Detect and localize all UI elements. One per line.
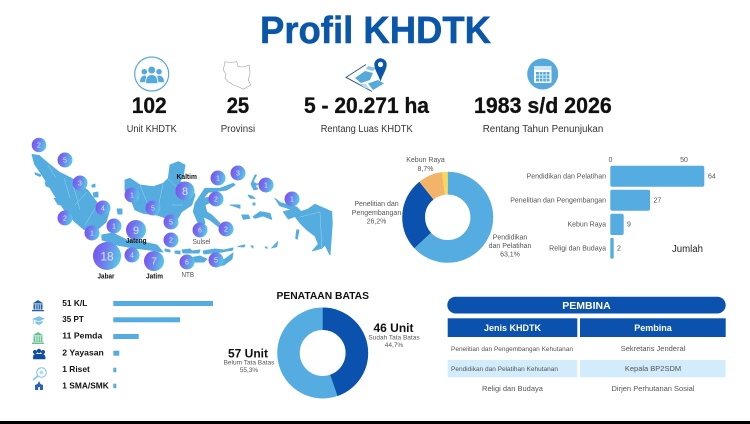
category labels: Penelitian dan Pengembangan [510,198,606,204]
donut labels: Pendidikan [493,234,527,242]
bubble group: 1 [290,196,294,204]
row: Yayasan: 2 Yayasan [62,347,104,357]
donut labels: Penelitian dan [354,201,399,208]
map labels: NTB [182,272,194,279]
axis labels [609,157,688,164]
stat: unit KHDTK: Unit KHDTK [127,124,177,135]
bubble group: 9 [133,225,139,237]
icon: calendar [527,58,558,90]
donut labels: Kebun Raya [406,157,445,164]
row: K/L [32,298,213,311]
map labels: Jatim [146,274,163,280]
label: sudah tata batas: 46 Unit [373,321,414,335]
list: pengelola [32,298,213,391]
bubble group: 2 [224,226,228,234]
bubble group: 6 [185,260,189,266]
label: belum tata batas [224,346,275,374]
stat: rentang tahun: Rentang Tahun Penunjukan [483,124,603,135]
section: penataan batas [224,290,420,387]
map labels: Kaltim [176,174,197,181]
category labels: Pendidikan dan Pelatihan [527,174,606,180]
value labels [617,174,716,252]
value labels: 64 [708,174,716,180]
stat: provinsi: Provinsi [221,124,255,135]
stat: unit KHDTK [127,57,177,135]
row: religi: Religi dan Budaya [482,384,544,393]
bubble group: 1 [264,182,268,190]
value labels: 2 [617,246,621,252]
bubble group: 3 [236,170,240,178]
label: sudah tata batas [368,321,420,349]
bubble group: 6 [198,228,202,234]
row: Riset: 1 Riset [62,364,90,374]
bubble group: 2 [63,216,67,222]
axis labels: 50 [680,157,688,164]
category labels [510,174,606,252]
bubble group: 8 [182,186,188,198]
stat: unit KHDTK: 102 [132,93,167,118]
bubble group: 2 [169,238,173,244]
bubble group: 2 [37,142,41,150]
row: penelitian: Penelitian dan Pengembangan Kehutanan [451,347,573,353]
icon: province outline [223,62,251,89]
row: PT [32,314,180,325]
map labels: Jabar [98,274,115,280]
value labels: 27 [654,198,661,204]
donut labels [352,157,532,258]
bubble group: 7 [151,256,157,268]
axis title: Jumlah [672,244,703,255]
header row: Pembina [634,323,673,333]
row: pendidikan: Pendidikan dan Pelatihan Kehutanan [451,367,558,373]
donut chart: jenis KHDTK [352,157,532,258]
donut labels: 26,2% [367,218,386,226]
row: pendidikan: Kepala BP2SDM [625,364,681,373]
donut labels: dan Pelatihan [489,243,532,250]
bubble group: 4 [101,206,105,212]
table title pill: PEMBINA [562,300,611,312]
donut segments [414,183,482,251]
bubble group: 5 [63,158,67,164]
stat: rentang tahun: 1983 s/d 2026 [474,93,612,118]
table title pill [447,297,726,314]
row: SMA/SMK: 1 SMA/SMK [62,381,110,391]
donut labels: 63,1% [500,252,520,258]
row: SMA/SMK [35,381,116,391]
bubble group: 1 [90,230,94,238]
map: islands [32,154,332,266]
bubble group [32,138,299,271]
header row [448,318,726,337]
donut labels: 8,7% [418,166,433,173]
stat: rentang tahun [474,58,612,135]
map of Indonesia with bubbles [32,138,332,280]
stat: rentang luas [304,58,430,135]
bubble group: 1 [130,192,134,200]
row: religi: Dirjen Perhutanan Sosial [612,384,695,393]
map labels: Jateng [126,238,146,245]
bubble group: 4 [130,252,134,260]
row: Pemda [32,331,139,344]
row: Riset [33,364,116,380]
bubble group: 18 [100,250,114,264]
category labels: Religi dan Budaya [549,246,606,252]
bubble group: 1 [112,224,116,230]
map labels [98,174,211,280]
stat: rentang luas: 5 - 20.271 ha [304,93,430,118]
icon: map with pin [346,58,387,92]
row: penelitian: Sekretaris Jenderal [621,344,686,353]
donut labels: Pengembangan [352,210,401,217]
label: belum tata batas: 57 Unit [228,346,268,360]
row: Pemda: 11 Pemda [62,331,103,341]
label: belum tata batas: 55,3% [240,367,258,374]
donut chart [288,319,357,387]
bars [610,166,704,259]
bar chart: jumlah [510,157,716,259]
icon: people [135,57,169,91]
stat: rentang luas: Rentang Luas KHDTK [321,124,413,135]
stat: provinsi [221,62,255,135]
title: Profil KHDTK [260,10,492,52]
row: religi [482,384,695,393]
bubble group: 5 [151,206,155,212]
row: K/L: 51 K/L [62,298,87,308]
heading: PENATAAN BATAS [276,290,369,302]
header row: Jenis KHDTK [484,323,542,333]
row: penelitian [451,344,686,353]
bubble group: 3 [78,180,82,188]
axis labels: 0 [609,157,613,164]
bubble group: 5 [169,220,173,226]
stat: provinsi: 25 [227,93,249,118]
bubble group: 2 [214,196,218,204]
map labels: Sulsel [192,239,211,246]
map: province borders [48,165,322,250]
row: pendidikan [448,360,726,377]
label: sudah tata batas: 44,7% [385,342,403,349]
bubble group: 1 [216,176,220,182]
value labels: 9 [627,222,631,228]
label: sudah tata batas: Sudah Tata Batas [368,334,420,342]
category labels: Kebun Raya [567,222,606,228]
row: Yayasan [33,347,119,359]
bubble group: 5 [214,258,218,264]
table: pembina [447,297,726,393]
label: belum tata batas: Belum Tata Batas [224,360,275,366]
row: PT: 35 PT [62,314,85,324]
